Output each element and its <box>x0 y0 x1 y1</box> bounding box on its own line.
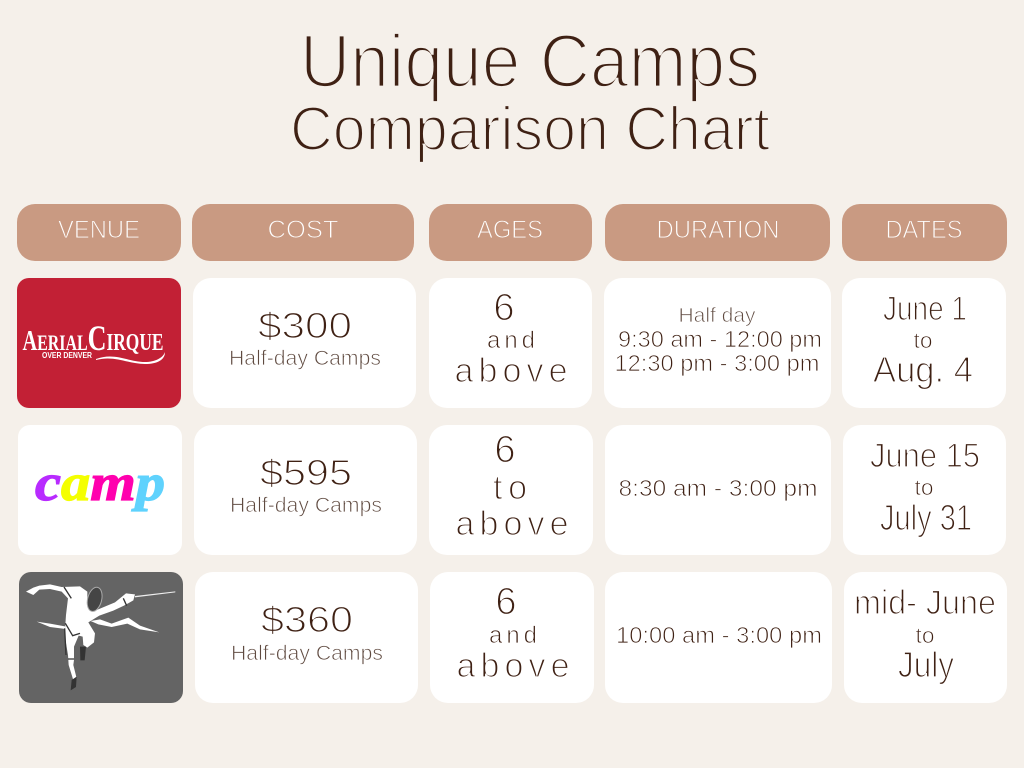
row: Camp <box>18 425 1006 555</box>
duration: half day sessions: 9:30 am - 12:00 pm <box>618 326 822 352</box>
header: ages: AGES <box>477 216 543 244</box>
dates: June 15 to July 31 <box>843 425 1006 555</box>
title <box>290 19 770 164</box>
row: Aerial Cirque <box>17 278 1006 408</box>
duration: 8:30 am - 3:00 pm <box>605 425 831 555</box>
dates: mid-June to July: July <box>898 644 954 685</box>
venue logo: Aerial Cirque: OVER DENVER <box>42 351 92 360</box>
cost: $300: $300 <box>258 305 352 346</box>
ages: 6 and above: 6 <box>493 287 515 329</box>
dates: June 15 to July 31: June 15 <box>870 437 980 475</box>
header: duration: DURATION <box>656 216 780 244</box>
cost: $300: Half-day Camps <box>229 347 381 370</box>
venue logo: Aerial Cirque <box>17 278 181 408</box>
header: cost: COST <box>268 216 338 244</box>
ages: 6 to above: to <box>493 469 527 507</box>
header: cost <box>192 204 414 261</box>
header: venue: VENUE <box>58 216 140 244</box>
ages: 6 and above: and <box>487 327 535 354</box>
venue logo: camp: camp <box>35 455 165 512</box>
cost: $360: Half-day Camps <box>231 642 383 665</box>
cost: $360 <box>195 572 418 703</box>
cost: $595: Half-day Camps <box>230 494 382 517</box>
header: venue <box>17 204 181 261</box>
dates: June 1 to Aug. 4 <box>842 278 1006 408</box>
title: Comparison Chart <box>290 95 770 164</box>
row: Fencing <box>19 572 1007 703</box>
duration: half day sessions: 12:30 pm - 3:00 pm <box>614 350 820 376</box>
ages: 6 and above: and <box>489 622 537 649</box>
ages: 6 and above <box>430 572 594 703</box>
cost: $300 <box>193 278 416 408</box>
ages: 6 to above <box>429 425 593 555</box>
ages: 6 and above: above <box>456 647 570 685</box>
venue logo: camp <box>18 425 182 555</box>
venue logo: fencer <box>19 572 183 703</box>
dates: mid-June to July <box>844 572 1007 703</box>
ages: 6 to above: 6 <box>494 429 516 471</box>
cost: $595: $595 <box>260 452 352 493</box>
duration: half day sessions <box>604 278 831 408</box>
header row <box>17 204 1007 261</box>
header: dates: DATES <box>886 216 962 244</box>
duration: 8:30 am - 3:00 pm: 8:30 am - 3:00 pm <box>618 475 818 501</box>
dates: June 1 to Aug. 4: Aug. 4 <box>873 349 973 390</box>
ages: 6 and above <box>429 278 592 408</box>
dates: mid-June to July: to <box>916 623 934 648</box>
dates: June 15 to July 31: July 31 <box>880 497 972 538</box>
duration: half day sessions: Half day <box>678 305 756 327</box>
cost: $595 <box>194 425 417 555</box>
dates: June 1 to Aug. 4: June 1 <box>883 290 967 328</box>
header: ages <box>429 204 592 261</box>
dates: June 15 to July 31: to <box>914 475 934 500</box>
ages: 6 and above: 6 <box>495 581 517 623</box>
title: Unique Camps <box>300 19 760 103</box>
dates: June 1 to Aug. 4: to <box>914 328 932 353</box>
ages: 6 and above: above <box>454 352 568 390</box>
dates: mid-June to July: mid- June <box>854 584 996 622</box>
ages: 6 to above: above <box>456 505 568 543</box>
header: duration <box>605 204 830 261</box>
cost: $360: $360 <box>261 599 353 640</box>
duration: 10:00 am - 3:00 pm <box>605 572 832 703</box>
duration: 10:00 am - 3:00 pm: 10:00 am - 3:00 pm <box>616 622 822 648</box>
venue logo: Aerial Cirque: AERIALCIRQUE <box>22 318 164 358</box>
header: dates <box>842 204 1007 261</box>
